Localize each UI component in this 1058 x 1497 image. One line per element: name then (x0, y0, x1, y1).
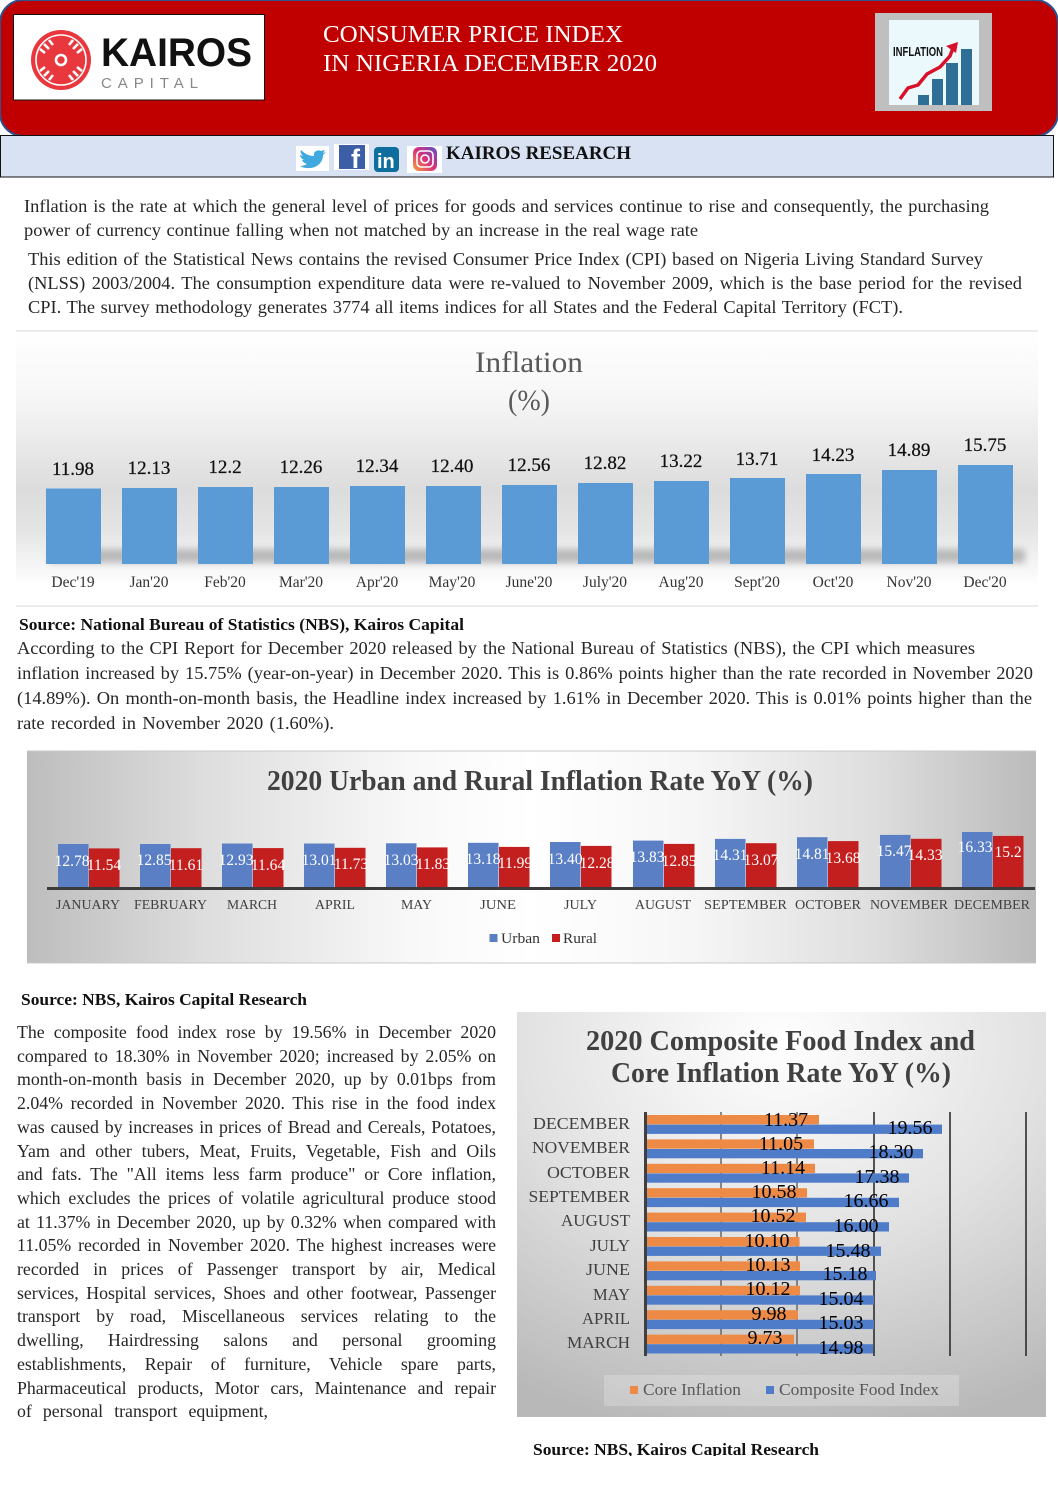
text block: statistical news edition: This edition of the Statistical News contains the revised Consumer Price Index (CPI) based on Nigeria Living Standard Survey (28, 248, 983, 268)
month labels: Sept'20 (734, 574, 780, 591)
urban values: 16.33 (958, 839, 993, 856)
value labels: 12.40 (431, 456, 473, 477)
month labels: Apr'20 (356, 574, 398, 591)
month labels: Dec'19 (51, 574, 95, 591)
text block: composite food index: transport by road, Miscellaneous services relating to the (17, 1306, 496, 1326)
text block: composite food index: of personal transport equipment, (17, 1401, 268, 1421)
month labels: MARCH (227, 898, 277, 913)
month labels: July'20 (583, 574, 627, 591)
legend: Rural (563, 931, 597, 947)
text block: composite food index: month-on-month basis in December 2020, up by 0.01bps from (17, 1069, 496, 1089)
text block: inflation definition (24, 196, 989, 240)
month labels: FEBRUARY (134, 898, 207, 913)
value labels: 13.71 (736, 449, 778, 470)
rural bars (89, 836, 1024, 888)
category labels: JULY (590, 1236, 630, 1255)
chart title: (%) (508, 384, 550, 417)
text block: composite food index: The composite food index rose by 19.56% in December 2020 (17, 1022, 496, 1042)
month labels (56, 898, 1031, 913)
value labels: 13.22 (660, 451, 702, 472)
month labels: Mar'20 (279, 574, 323, 591)
text block: composite food index: 2.04% recorded in November 2020. This rise in the food index (17, 1093, 496, 1113)
core inflation values: 11.14 (761, 1157, 805, 1179)
rural values: 13.07 (744, 852, 779, 869)
legend: Composite Food Index (779, 1380, 939, 1399)
chart title: 2020 Composite Food Index and (586, 1026, 975, 1057)
category labels: SEPTEMBER (528, 1187, 631, 1206)
urban values: 12.85 (137, 852, 172, 869)
composite food values: 15.48 (826, 1240, 870, 1262)
icon: Kairos emblem (31, 30, 91, 90)
value labels: 14.23 (812, 445, 854, 466)
source: urban rural chart: Source: NBS, Kairos Capital Research (21, 990, 307, 1009)
icon: facebook: f (351, 144, 361, 174)
month labels: May'20 (429, 574, 476, 591)
value labels: 12.56 (508, 455, 550, 476)
core inflation values: 10.58 (752, 1181, 796, 1203)
text block: CPI report summary: According to the CPI Report for December 2020 released by the National Bureau of Statistics (NBS), the CPI which measures (17, 638, 975, 658)
text block: inflation definition: Inflation is the rate at which the general level of prices for goods and services continue to rise and consequently, the purchasing (24, 196, 989, 216)
text block: CPI report summary: inflation increased by 15.75% (year-on-year) in December 2020. This is 0.86% points higher than the rate recorded in November 2020 (17, 662, 1033, 682)
core inflation bars (647, 1115, 819, 1344)
icon: inflation picture (875, 13, 992, 111)
logo wordmark: KAIROS (101, 31, 252, 75)
urban values: 13.01 (302, 852, 336, 869)
title: CONSUMER PRICE INDEX (323, 22, 623, 48)
text block: composite food index (17, 1022, 496, 1421)
text block: composite food index: Pharmaceutical products, Motor cars, Maintenance and repair (17, 1378, 496, 1398)
text block: CPI report summary (17, 638, 1033, 733)
composite food values: 15.04 (818, 1288, 864, 1310)
value labels: 11.98 (52, 459, 94, 480)
category labels: DECEMBER (533, 1114, 631, 1133)
month labels: Oct'20 (813, 574, 854, 591)
chart: inflation bars (16, 331, 1038, 606)
urban values: 13.18 (466, 851, 501, 868)
text block: statistical news edition: (NLSS) 2003/2004. The consumption expenditure data were re-valued to November 2009, which is the base period for the revised (28, 272, 1022, 292)
urban values: 13.03 (384, 852, 419, 869)
legend (604, 1375, 959, 1406)
icon: linkedin (374, 147, 399, 173)
text block: composite food index: Yam and other tubers, Meat, Fruits, Vegetable, Fish and Oils (17, 1141, 496, 1161)
icon: facebook (334, 144, 369, 174)
rural values: 13.68 (826, 850, 861, 867)
value labels: 12.34 (356, 456, 399, 477)
text block: statistical news edition (28, 248, 1022, 317)
text block: statistical news edition: CPI. The survey methodology generates 3774 all items indices for all States and the Federal Capital Territory (FCT). (28, 296, 903, 316)
core inflation values: 10.10 (744, 1230, 790, 1252)
core inflation values (744, 1109, 808, 1349)
text block: composite food index: dwelling, Hairdressing salons and personal grooming (17, 1330, 496, 1350)
core inflation values: 10.13 (746, 1254, 790, 1276)
text block: composite food index: which excludes the prices of volatile agricultural produce stood (17, 1188, 496, 1208)
month labels: June'20 (506, 574, 553, 591)
chart title: Inflation (475, 346, 583, 379)
value labels: 14.89 (888, 440, 930, 461)
bars and values (46, 465, 1013, 564)
value labels: 12.82 (584, 453, 626, 474)
rural values: 12.85 (662, 853, 697, 870)
month labels: NOVEMBER (870, 898, 949, 913)
text block: composite food index: 11.05% recorded in November 2020. The highest increases were (17, 1235, 496, 1255)
chart title: 2020 Urban and Rural Inflation Rate YoY (%) (267, 766, 813, 797)
urban values: 13.40 (548, 851, 583, 868)
composite food values: 17.38 (854, 1166, 900, 1188)
text block: composite food index: and fats. The "All items less farm produce" or Core inflation, (17, 1164, 496, 1184)
chart title: Core Inflation Rate YoY (%) (611, 1058, 951, 1089)
core inflation values: 10.12 (746, 1278, 790, 1300)
urban values: 15.47 (877, 843, 912, 860)
month labels: Nov'20 (886, 574, 932, 591)
core inflation values: 9.73 (748, 1327, 782, 1349)
text block: composite food index: at 11.37% in December 2020, up by 0.32% when compared with (17, 1212, 496, 1232)
chart: urban and rural inflation (27, 751, 1036, 963)
month labels: SEPTEMBER (704, 898, 788, 913)
month labels: Feb'20 (204, 574, 246, 591)
text block: composite food index: was caused by increases in prices of Bread and Cereals, Potatoes, (17, 1117, 496, 1137)
value labels: 12.26 (280, 457, 322, 478)
chart title (475, 346, 583, 417)
urban values: 12.93 (219, 852, 254, 869)
rural values: 11.83 (416, 856, 450, 873)
legend: Core Inflation (643, 1380, 741, 1399)
legend (490, 931, 597, 947)
category labels: JUNE (586, 1260, 630, 1279)
band label: KAIROS RESEARCH (446, 143, 631, 164)
chart title (586, 1026, 975, 1089)
chart: composite food and core inflation (517, 1012, 1046, 1417)
month labels: Jan'20 (130, 574, 169, 591)
month labels: AUGUST (635, 898, 691, 913)
source: food chart: Source: NBS, Kairos Capital Research (533, 1440, 819, 1459)
icon: twitter (296, 146, 329, 171)
month labels: DECEMBER (954, 898, 1031, 913)
text block: composite food index: compared to 18.30% in November 2020; increased by 2.05% on (17, 1046, 496, 1066)
rural values: 12.28 (580, 855, 615, 872)
icon: instagram (407, 146, 442, 173)
composite food values: 14.98 (818, 1337, 864, 1359)
category labels (528, 1114, 631, 1352)
composite food values: 16.00 (834, 1215, 878, 1237)
category labels: OCTOBER (547, 1163, 631, 1182)
source: inflation chart: Source: National Bureau of Statistics (NBS), Kairos Capital (19, 615, 464, 634)
core inflation values: 11.37 (764, 1109, 808, 1131)
category labels: MAY (593, 1285, 630, 1304)
text block: CPI report summary: (14.89%). On month-on-month basis, the Headline index increased by 1.61% in December 2020. This is 0.01% points higher than the (17, 688, 1032, 708)
legend: Urban (501, 931, 541, 947)
month labels: Aug'20 (658, 574, 704, 591)
rural values: 11.64 (251, 857, 285, 874)
month labels: JUNE (480, 898, 516, 913)
title (323, 22, 657, 77)
month labels: OCTOBER (795, 898, 862, 913)
value labels: 12.2 (208, 457, 242, 478)
text block: composite food index: recorded in prices of Passenger transport by air, Medical (17, 1259, 496, 1279)
composite food values: 15.03 (818, 1312, 864, 1334)
urban values: 14.31 (713, 847, 747, 864)
composite food values (818, 1117, 932, 1359)
social and research band (0, 136, 1054, 177)
text block: composite food index: services, Hospital services, Shoes and other footwear, Passenger (17, 1283, 496, 1303)
value labels: 12.13 (128, 458, 170, 479)
month labels: JANUARY (56, 898, 120, 913)
category labels: NOVEMBER (532, 1138, 631, 1157)
month labels (51, 574, 1007, 591)
title: IN NIGERIA DECEMBER 2020 (323, 51, 657, 77)
composite food bars (647, 1125, 942, 1354)
rural values: 11.54 (87, 857, 121, 874)
composite food values: 16.66 (844, 1190, 888, 1212)
vertical axis (644, 1112, 647, 1356)
text block: CPI report summary: rate recorded in November 2020 (1.60%). (17, 712, 334, 732)
header banner (0, 0, 1058, 136)
rural values: 11.73 (334, 856, 368, 873)
core inflation values: 11.05 (759, 1133, 803, 1155)
category labels: MARCH (567, 1333, 630, 1352)
composite food values: 18.30 (868, 1141, 914, 1163)
urban values: 13.83 (630, 849, 665, 866)
rural values: 11.99 (498, 855, 532, 872)
text block: inflation definition: power of currency continue falling when not matched by an increase in the real wage rate (24, 220, 698, 240)
baseline axis (47, 887, 1035, 890)
category labels: AUGUST (561, 1211, 631, 1230)
logo subtitle: CAPITAL (101, 75, 198, 92)
urban values (55, 839, 993, 870)
icon: linkedin: in (377, 151, 395, 173)
core inflation values: 10.52 (750, 1205, 796, 1227)
value labels: 15.75 (964, 435, 1006, 456)
composite food values: 19.56 (888, 1117, 932, 1139)
category labels: APRIL (582, 1309, 630, 1328)
month labels: APRIL (315, 898, 355, 913)
urban bars (58, 832, 992, 888)
core inflation values: 9.98 (752, 1303, 786, 1325)
logo box (14, 14, 264, 100)
rural values: 14.33 (908, 847, 943, 864)
month labels: Dec'20 (963, 574, 1007, 591)
composite food values: 15.18 (822, 1263, 868, 1285)
value labels (52, 435, 1006, 480)
rural values: 15.2 (994, 844, 1022, 861)
rural values: 11.61 (169, 857, 203, 874)
gridlines (721, 1112, 797, 1356)
icon: inflation picture: INFLATION (893, 44, 943, 59)
urban values: 12.78 (55, 853, 90, 870)
text block: composite food index: establishments, Repair of furniture, Vehicle spare parts, (17, 1354, 496, 1374)
rural values (87, 844, 1022, 874)
month labels: JULY (564, 898, 597, 913)
urban values: 14.81 (795, 846, 829, 863)
month labels: MAY (401, 898, 432, 913)
